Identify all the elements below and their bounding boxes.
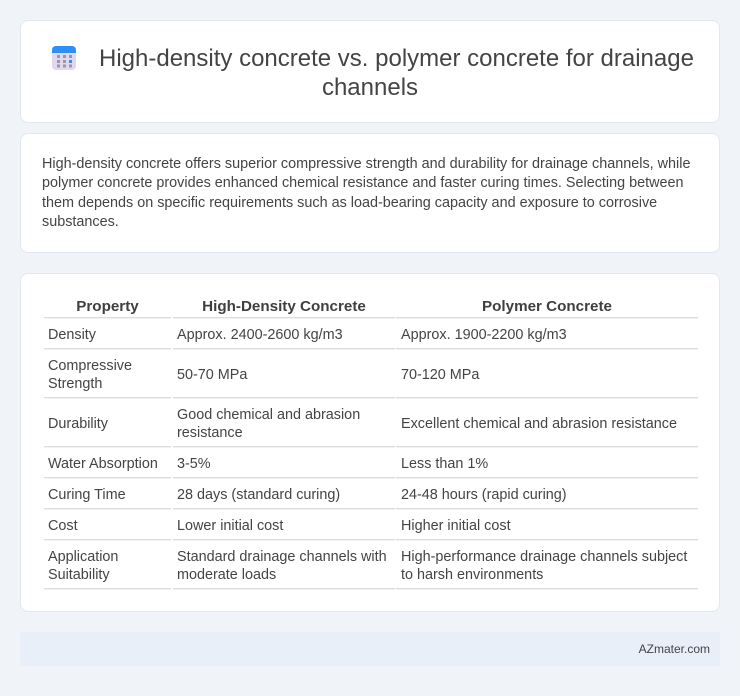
row: water absorption: Less than 1% (401, 456, 488, 472)
footer credit: AZmater.com (639, 642, 710, 656)
row: cost: Higher initial cost (401, 518, 511, 534)
row: application suitability: Application (48, 549, 118, 565)
row: cost: Cost (48, 518, 78, 534)
row: density (48, 327, 567, 343)
comparison table (44, 298, 698, 590)
row: compressive strength: Strength (48, 376, 102, 392)
row: water absorption (48, 456, 488, 472)
row: curing time: 28 days (standard curing) (177, 487, 340, 503)
row: durability: Excellent chemical and abrasion resistance (401, 416, 677, 432)
summary panel (20, 133, 720, 253)
row: compressive strength: Compressive (48, 358, 132, 374)
summary text: them depends on specific requirements such as load-bearing capacity and exposure to corrosive (42, 195, 657, 211)
row: application suitability: Standard drainage channels with (177, 549, 387, 565)
row: application suitability: Suitability (48, 567, 110, 583)
row: curing time (48, 487, 567, 503)
row: durability: Good chemical and abrasion (177, 407, 360, 423)
row: compressive strength: 70-120 MPa (401, 367, 479, 383)
row: curing time: 24-48 hours (rapid curing) (401, 487, 567, 503)
row: cost (48, 518, 511, 534)
row: curing time: Curing Time (48, 487, 126, 503)
row: compressive strength: 50-70 MPa (177, 367, 247, 383)
summary text (42, 156, 690, 230)
header panel (20, 20, 720, 123)
row: cost: Lower initial cost (177, 518, 283, 534)
header row: Polymer Concrete (482, 298, 612, 315)
summary text: polymer concrete provides enhanced chemical resistance and faster curing times. Selecting between (42, 175, 684, 191)
summary text: substances. (42, 214, 119, 230)
icon: calendar (52, 46, 76, 70)
footer bar (20, 632, 720, 666)
row: application suitability (48, 549, 688, 583)
header row (76, 298, 612, 315)
row: durability (48, 407, 677, 441)
row: density: Density (48, 327, 96, 343)
title: High-density concrete vs. polymer concrete for drainage (99, 45, 694, 72)
row: density: Approx. 1900-2200 kg/m3 (401, 327, 567, 343)
summary text: High-density concrete offers superior compressive strength and durability for drainage channels, while (42, 156, 690, 172)
row: application suitability: High-performance drainage channels subject (401, 549, 687, 565)
title (99, 45, 694, 101)
header row: High-Density Concrete (202, 298, 366, 315)
row: water absorption: 3-5% (177, 456, 211, 472)
title: channels (322, 74, 418, 101)
row: compressive strength (48, 358, 480, 392)
row: density: Approx. 2400-2600 kg/m3 (177, 327, 343, 343)
row: durability: resistance (177, 425, 243, 441)
row: application suitability: to harsh environments (401, 567, 543, 583)
row: application suitability: moderate loads (177, 567, 276, 583)
row: durability: Durability (48, 416, 108, 432)
header row: Property (76, 298, 139, 315)
table panel (20, 273, 720, 612)
row: water absorption: Water Absorption (48, 456, 158, 472)
